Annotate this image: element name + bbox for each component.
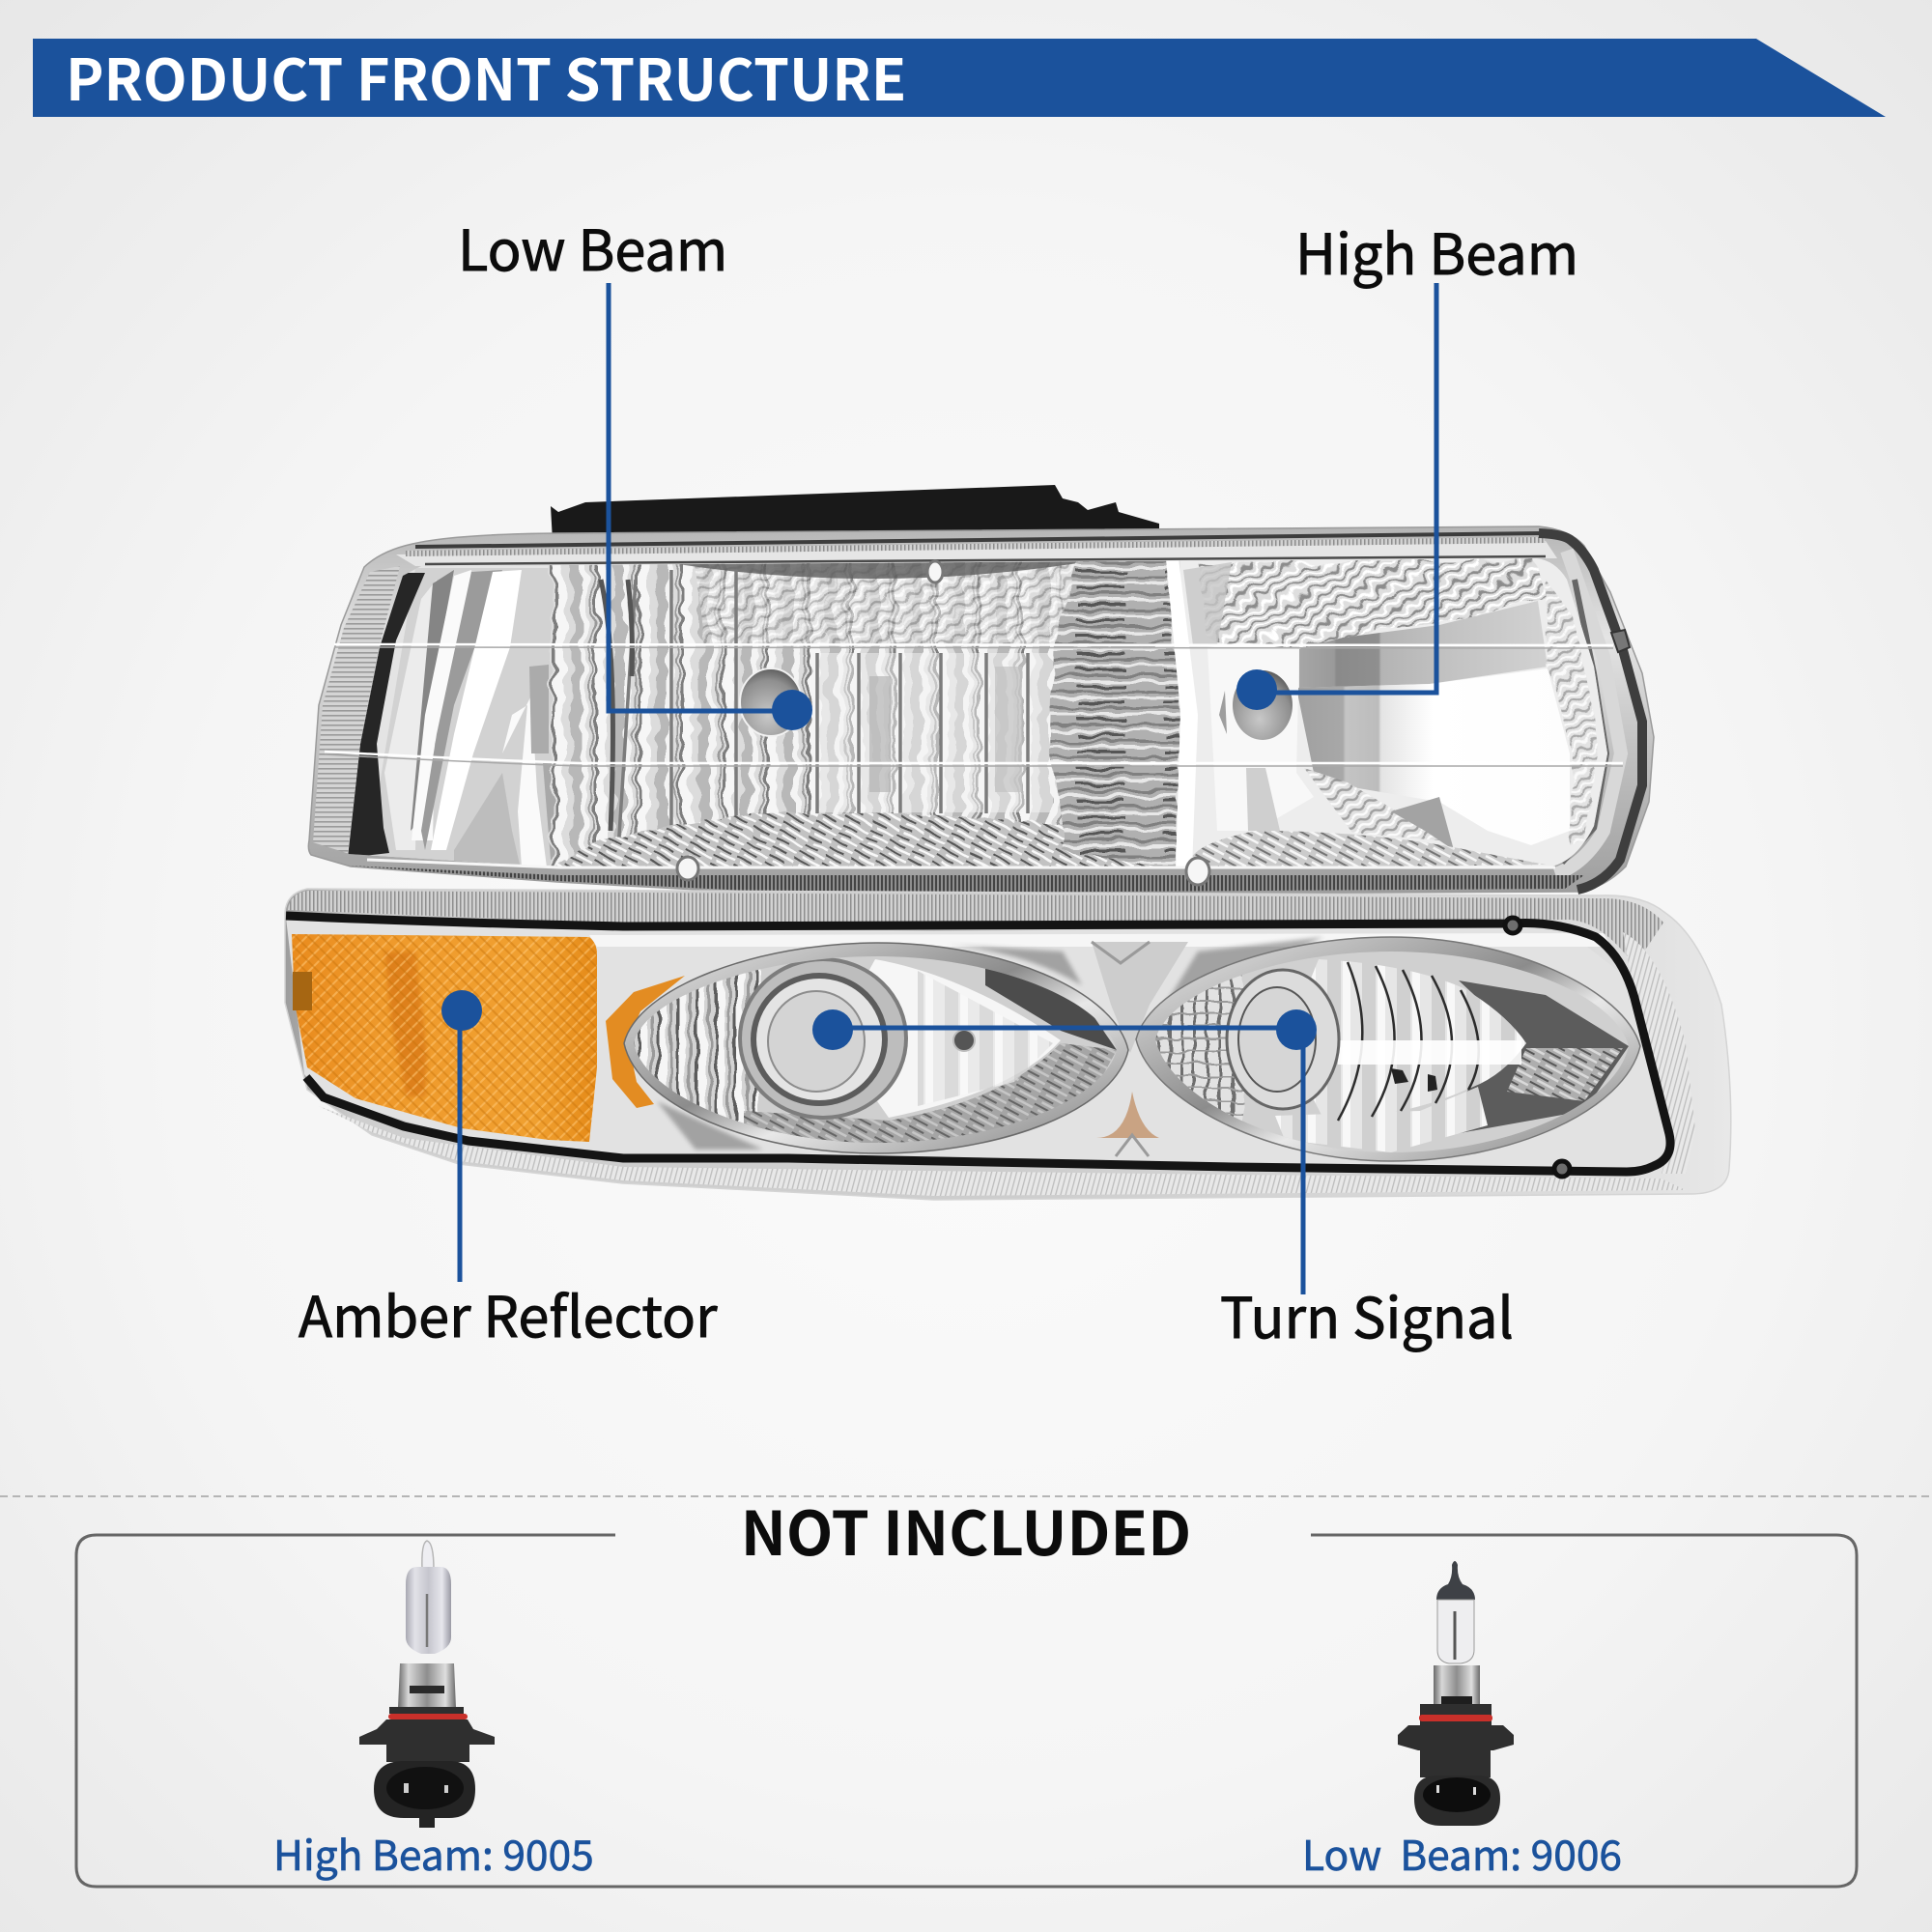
central rib lines <box>618 570 1028 850</box>
white area around the high beam hole <box>1208 642 1314 831</box>
upper ripple on ribs <box>696 564 1078 645</box>
header banner <box>33 35 1886 118</box>
lower right ripple <box>1190 831 1546 869</box>
lower bumper signal lamp <box>285 889 1731 1200</box>
9005 glass <box>406 1567 451 1654</box>
9006 plug <box>1414 1776 1500 1826</box>
left facet of right reflector <box>1183 562 1232 645</box>
top chrome strip <box>396 541 1557 566</box>
right inner dark line <box>1562 580 1606 863</box>
9005 plug <box>374 1761 475 1828</box>
9005 filament <box>426 1594 428 1647</box>
chrome shadows around lenses <box>657 937 1323 1150</box>
9006 collar slot <box>1441 1696 1472 1708</box>
label: high beam: High Beam <box>1295 210 1578 291</box>
9005 plug opening <box>386 1767 464 1809</box>
housing chrome interior <box>286 918 1667 1173</box>
9006 plug opening <box>1423 1777 1491 1812</box>
dark low rib marks <box>601 580 632 831</box>
black gasket <box>286 916 1670 1172</box>
ribbed top band <box>288 891 1663 966</box>
caption: high beam 9005: High Beam: 9005 <box>273 1824 594 1883</box>
leader: turn signal <box>812 1009 1317 1294</box>
lens interior <box>338 551 1623 879</box>
caption: low beam 9006: Low Beam: 9006 <box>1302 1824 1622 1883</box>
top dark trim lines <box>415 533 1542 547</box>
chrome center bridge <box>1092 942 1188 1053</box>
9005 pins <box>404 1783 448 1793</box>
central lower bright area <box>811 653 1053 812</box>
base of lens <box>338 551 1613 879</box>
left zone <box>348 568 570 867</box>
9005 collar slot <box>410 1686 444 1693</box>
left ribbed edge <box>313 566 400 854</box>
bottom dark ribbed band <box>348 866 1584 894</box>
9005 red ring <box>388 1714 468 1719</box>
9006 filament <box>1453 1611 1457 1660</box>
left lens outer ribs <box>628 952 759 1140</box>
panel: not included <box>76 1486 1857 1887</box>
ribbed right band <box>1623 932 1695 1174</box>
white strip beside divider <box>1166 558 1198 869</box>
left lens bright reflector <box>850 959 1061 1118</box>
right lens arc ribs <box>1338 962 1479 1121</box>
left lens rings <box>740 959 906 1118</box>
left lens dark upper right <box>985 966 1117 1050</box>
right inner cone upper <box>1299 601 1548 688</box>
9005 metal collar <box>398 1663 456 1708</box>
left lens <box>624 943 1130 1154</box>
top ribbed band <box>406 537 1546 556</box>
right lens dark side <box>1449 980 1629 1135</box>
left lens dark lower band <box>744 1043 1117 1150</box>
dark reflection arc <box>678 561 1078 579</box>
left lens small node <box>953 1030 975 1051</box>
leader: high beam <box>1236 283 1436 710</box>
right lens ovoid reflector <box>1285 959 1526 1121</box>
central vertical ribs <box>551 558 1063 867</box>
9006 glass <box>1437 1600 1474 1663</box>
black rear housing <box>551 485 1159 541</box>
right lens base <box>1150 947 1633 1154</box>
lens mounting studs <box>677 561 1209 885</box>
amber glow under lenses <box>1096 1092 1159 1138</box>
top inner dark line <box>425 556 1546 564</box>
right inner chrome trim <box>1555 551 1621 874</box>
leader: amber reflector <box>441 990 482 1282</box>
dashed divider <box>0 1495 1932 1497</box>
9006 red ring <box>1419 1715 1492 1721</box>
9006 metal collar <box>1434 1665 1480 1712</box>
ribbed bottom band <box>319 1106 1686 1196</box>
bulb: 9006 <box>1398 1561 1514 1826</box>
amber reflector lens <box>292 934 597 1142</box>
lower ripple reflector <box>554 811 1152 866</box>
label: turn signal: Turn Signal <box>1220 1273 1514 1354</box>
right reflector base <box>1180 556 1623 869</box>
small amber side reflector <box>606 976 685 1108</box>
amber darker strip <box>384 952 427 1096</box>
right inner cone lower <box>1296 668 1570 845</box>
right lens dark flecks <box>1391 1068 1437 1092</box>
central grey reflection <box>869 676 891 792</box>
side ripple <box>1546 580 1599 845</box>
leader: low beam <box>609 283 812 730</box>
chrome trim under gasket <box>589 933 1611 947</box>
title: PRODUCT FRONT STRUCTURE <box>66 35 906 118</box>
right upper ripple <box>1198 560 1546 649</box>
grey fleck left of hole <box>1219 691 1227 734</box>
right lens <box>1136 937 1640 1161</box>
lens bottom white line <box>367 860 1555 867</box>
dark right gasket <box>1539 533 1642 890</box>
label: low beam: Low Beam <box>458 206 727 287</box>
left lens reflector ribs <box>918 971 1053 1106</box>
bulb: 9005 <box>359 1541 495 1828</box>
lens seam lines <box>325 644 1623 763</box>
high beam bulb hole <box>1233 670 1293 740</box>
9005 tip <box>422 1541 434 1570</box>
right lens lower scallops <box>1275 1087 1488 1152</box>
amber dark insert <box>293 972 312 1010</box>
heading: not included: NOT INCLUDED <box>741 1486 1191 1574</box>
chrome outer frame <box>308 526 1654 895</box>
lens chevrons <box>1092 942 1150 1156</box>
right lens hub <box>1238 987 1316 1092</box>
9006 pins <box>1436 1785 1476 1795</box>
right side tab <box>1611 630 1630 652</box>
lower right facets <box>1246 768 1280 831</box>
right lens bright band <box>1338 1040 1521 1065</box>
chrome outer bezel <box>285 889 1731 1200</box>
upper headlight <box>308 485 1654 895</box>
low beam bulb hole <box>740 668 802 736</box>
amber mesh texture <box>292 934 597 1142</box>
label: amber reflector: Amber Reflector <box>298 1272 718 1353</box>
left lens hub <box>768 991 865 1092</box>
divider ribs <box>1050 558 1180 869</box>
9006 base <box>1398 1704 1514 1777</box>
right lens lattice left <box>1150 956 1242 1130</box>
gasket screws <box>1505 918 1570 1177</box>
right lens hub ring <box>1227 970 1339 1109</box>
left lens base <box>628 947 1130 1154</box>
9006 cap <box>1436 1561 1475 1600</box>
9005 base <box>359 1707 495 1762</box>
